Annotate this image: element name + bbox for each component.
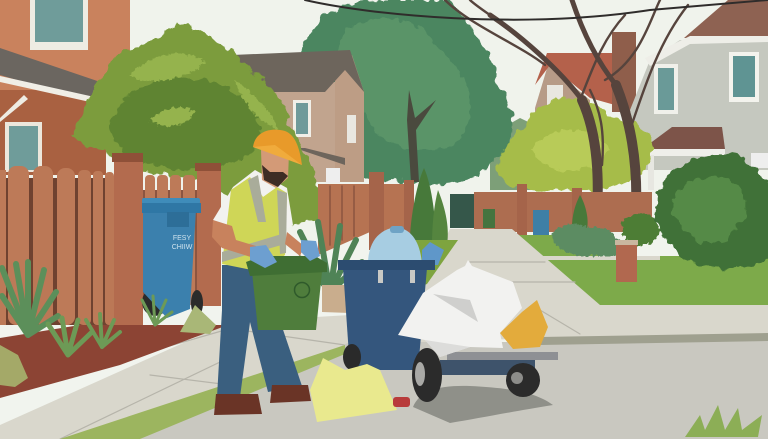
front wheel xyxy=(412,348,442,402)
left house xyxy=(0,0,130,175)
pale yellow bag on road xyxy=(310,358,397,422)
flowers behind bin xyxy=(322,285,350,313)
head xyxy=(261,150,289,188)
plastic dome xyxy=(368,227,422,264)
mulch flower bed xyxy=(0,325,228,398)
far fence and gate xyxy=(450,184,652,237)
large navy bin with lid dome xyxy=(338,226,444,370)
kerb xyxy=(540,333,768,345)
beard xyxy=(262,165,288,187)
blue wheelie bin xyxy=(142,198,203,318)
left boot xyxy=(214,394,262,415)
sidewalk joints xyxy=(0,262,580,439)
right grey house xyxy=(630,0,768,190)
flower clusters xyxy=(0,305,216,387)
sidewalk network xyxy=(0,229,768,439)
yellow-green tree xyxy=(498,98,654,191)
white rubbish sack xyxy=(398,260,522,357)
foreground grass tuft xyxy=(685,405,762,437)
large green tree xyxy=(301,0,512,184)
grass strip along pavement xyxy=(60,345,345,439)
blue glove on rim xyxy=(422,242,444,265)
road shadow under trailer xyxy=(413,386,553,423)
worker xyxy=(212,130,311,415)
centre house xyxy=(232,50,364,183)
right lawn xyxy=(512,235,768,306)
asphalt road xyxy=(140,340,768,439)
right boot xyxy=(270,385,311,403)
hard hat xyxy=(253,130,302,165)
legs xyxy=(217,265,302,397)
distant hill xyxy=(490,118,545,190)
bare tree branches and overhead wire xyxy=(305,0,768,230)
red-roofed house xyxy=(535,32,636,130)
red can xyxy=(393,397,410,407)
fence behind worker xyxy=(318,172,414,255)
blue wheelie bin: CHIIW xyxy=(172,244,193,251)
shirt xyxy=(213,170,293,245)
sky xyxy=(0,0,768,240)
green bin xyxy=(246,256,327,330)
trailer with white sack xyxy=(398,260,558,402)
arm xyxy=(212,220,256,258)
side path across lawn xyxy=(541,256,660,260)
right garden shrubs and brick pillar xyxy=(552,213,660,282)
worker gloves xyxy=(250,240,320,268)
spiky plant behind green bin xyxy=(300,222,362,292)
rear wheel xyxy=(506,363,540,397)
trailer chassis xyxy=(440,360,535,375)
large round shrub xyxy=(656,153,768,268)
left agave plants xyxy=(2,262,172,355)
yellow bag xyxy=(500,300,548,349)
leafy bush tree behind fence xyxy=(72,20,326,225)
lawn by path xyxy=(325,240,458,315)
cypress shrubs xyxy=(410,168,588,246)
near wooden fence xyxy=(0,153,221,325)
bin label: FESY xyxy=(173,235,191,242)
safety vest xyxy=(222,177,287,272)
